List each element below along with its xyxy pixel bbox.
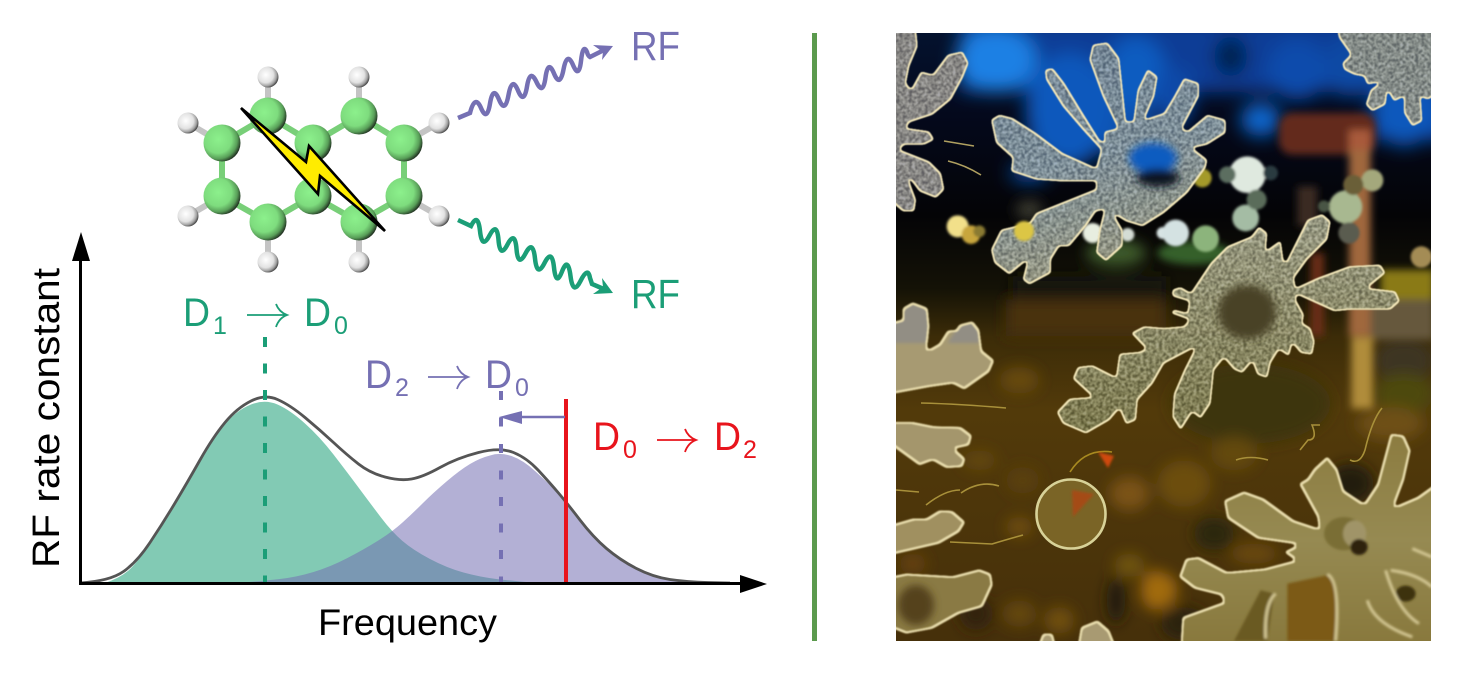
bubble — [1036, 480, 1106, 548]
thin streaks — [896, 141, 1382, 544]
divider — [812, 33, 817, 641]
label: RF green: RF — [631, 271, 680, 317]
label: D0 to D2 — [593, 415, 757, 464]
blurred blue sky — [956, 20, 1450, 183]
label: D0 to D2: D — [593, 415, 620, 459]
label: D2 to D0: 0 — [515, 374, 529, 402]
label: D1 to D0: D — [183, 291, 210, 335]
label: D0 to D2: 0 — [623, 436, 637, 464]
green dashed line — [263, 337, 267, 583]
panel: frequency chart — [26, 232, 767, 643]
label: RF purple: RF — [631, 23, 680, 69]
crystal: bottom right — [1179, 434, 1441, 647]
purple shift arrow — [499, 411, 565, 424]
arrow: purple wavy emission — [458, 45, 613, 118]
label: D1 to D0: 0 — [334, 312, 348, 340]
green band D1 to D0 — [105, 402, 537, 583]
crystal: upper left edge — [889, 30, 969, 211]
blurred spot on middle crystal — [1218, 285, 1276, 339]
icon: lightning bolt — [241, 108, 385, 231]
label: D2 to D0 — [365, 353, 529, 402]
ghost bubble and red speck — [1070, 451, 1114, 472]
crystal: top centre — [991, 42, 1226, 285]
panel: crystal photograph — [889, 20, 1450, 647]
label: D2 to D0: 2 — [395, 374, 409, 402]
bokeh lights — [947, 156, 1432, 268]
axes — [72, 232, 767, 593]
carbon atoms — [204, 98, 422, 240]
label: D0 to D2: 2 — [743, 436, 757, 464]
purple band D2 to D0 — [237, 454, 725, 583]
label: D1 to D0: D — [304, 291, 331, 335]
hydrogen atoms — [178, 66, 450, 272]
red building and post — [1157, 113, 1434, 409]
total rate curve — [80, 397, 730, 583]
arrow: green wavy emission — [458, 220, 613, 294]
dark inside of lower left crystal — [898, 585, 934, 625]
photo background — [896, 33, 1431, 641]
label: D2 to D0: D — [485, 353, 512, 397]
crystals: left edge — [889, 302, 1116, 647]
crystal: middle — [1057, 214, 1400, 434]
crystal centre hole — [1129, 143, 1180, 187]
details of bottom crystal — [1234, 517, 1432, 641]
y axis label: RF rate constant — [26, 268, 68, 568]
red threshold line — [564, 399, 568, 583]
bonds — [188, 77, 439, 262]
label: D0 to D2: D — [714, 415, 741, 459]
label: D1 to D0 — [183, 291, 348, 340]
label: D1 to D0: 1 — [213, 312, 227, 340]
icon: molecule — [178, 66, 450, 272]
x axis label: Frequency — [318, 602, 498, 643]
crystal: upper right edge — [1337, 33, 1431, 126]
blurred ground and post — [899, 200, 1434, 640]
label: D2 to D0: D — [365, 353, 392, 397]
bokeh over crystal arm — [1014, 221, 1034, 241]
purple dashed line — [499, 391, 503, 583]
